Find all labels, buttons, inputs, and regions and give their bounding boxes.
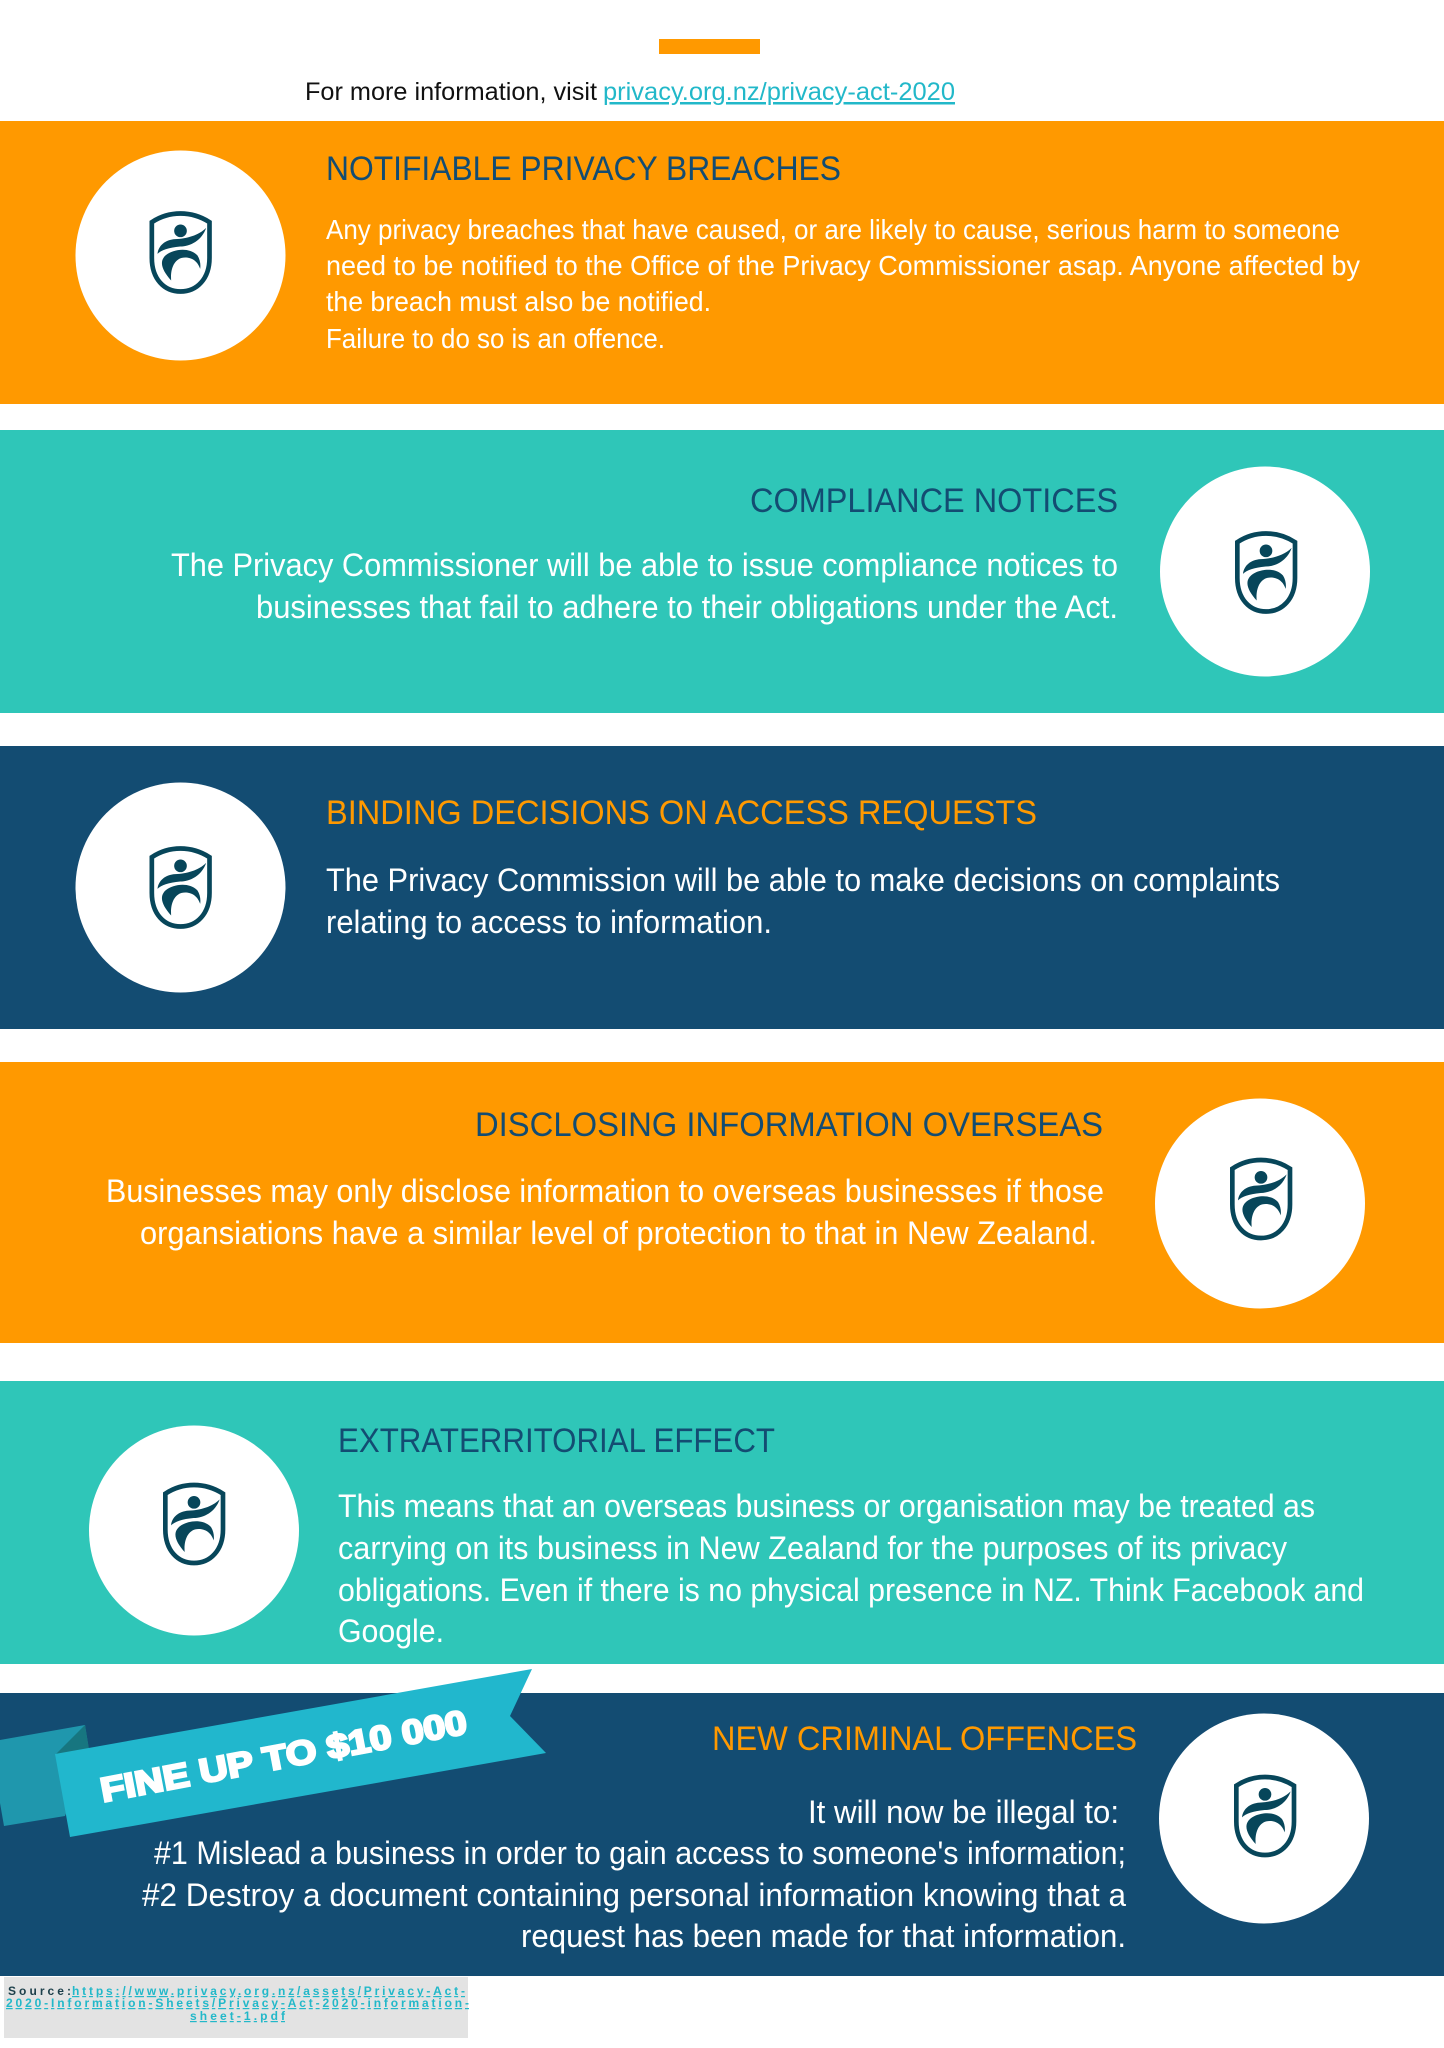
accent bar	[659, 39, 760, 54]
body text	[338, 1488, 1364, 1649]
ribbon: fine up to $10 000: FINE UP TO $10 000	[97, 1703, 470, 1810]
panel: notifiable privacy breaches	[0, 121, 1444, 404]
icon: shield badge	[1159, 1714, 1369, 1924]
body text: obligations. Even if there is no physical presence in NZ. Think Facebook and	[338, 1572, 1364, 1608]
icon: shield badge	[76, 782, 286, 992]
body text: carrying on its business in New Zealand for the purposes of its privacy	[338, 1530, 1287, 1566]
heading: DISCLOSING INFORMATION OVERSEAS	[475, 1106, 1103, 1144]
panel: new criminal offences	[0, 1693, 1444, 1976]
heading: NOTIFIABLE PRIVACY BREACHES	[326, 150, 841, 188]
icon: shield badge	[1155, 1098, 1365, 1308]
icon: shield badge	[89, 1426, 299, 1636]
icon: shield badge	[1160, 466, 1370, 676]
body text: businesses that fail to adhere to their obligations under the Act.	[256, 589, 1118, 625]
body text: the breach must also be notified.	[326, 286, 711, 317]
body text	[326, 862, 1280, 940]
source citation: sheet-1.pdf	[190, 2009, 286, 2023]
panel: extraterritorial effect	[0, 1381, 1444, 1664]
source citation: https://www.privacy.org.nz/assets/Privacy-Act-	[72, 1984, 465, 1998]
panel: binding decisions on access requests	[0, 746, 1444, 1029]
body text	[106, 1173, 1104, 1251]
source citation: Source:	[8, 1984, 71, 1998]
body text: Failure to do so is an offence.	[326, 323, 665, 354]
ribbon: fine up to $10 000	[0, 1669, 546, 1837]
heading: NEW CRIMINAL OFFENCES	[712, 1720, 1137, 1758]
source citation	[4, 1977, 469, 2038]
body text: The Privacy Commission will be able to make decisions on complaints	[326, 862, 1280, 898]
more information line: For more information, visit	[305, 78, 597, 106]
body text: Businesses may only disclose information to overseas businesses if those	[106, 1173, 1104, 1209]
body text: This means that an overseas business or organisation may be treated as	[338, 1488, 1315, 1524]
body text: #2 Destroy a document containing personal information knowing that a	[142, 1877, 1126, 1913]
body text: It will now be illegal to:	[808, 1794, 1119, 1830]
body text	[171, 547, 1118, 625]
body text: relating to access to information.	[326, 904, 772, 940]
more information line: privacy.org.nz/privacy-act-2020	[603, 78, 955, 106]
body text: The Privacy Commissioner will be able to issue compliance notices to	[171, 547, 1118, 583]
body text: #1 Mislead a business in order to gain access to someone's information;	[154, 1835, 1126, 1871]
panel: disclosing information overseas	[0, 1062, 1444, 1343]
body text: request has been made for that information.	[521, 1918, 1126, 1954]
body text: organsiations have a similar level of protection to that in New Zealand.	[140, 1215, 1097, 1251]
body text: Google.	[338, 1613, 444, 1649]
icon: shield badge	[76, 150, 286, 360]
more information line	[305, 78, 955, 106]
body text	[326, 214, 1360, 354]
heading: EXTRATERRITORIAL EFFECT	[338, 1422, 775, 1460]
panel: compliance notices	[0, 430, 1444, 713]
body text: need to be notified to the Office of the Privacy Commissioner asap. Anyone affected by	[326, 250, 1360, 281]
heading: COMPLIANCE NOTICES	[750, 482, 1118, 520]
body text	[142, 1794, 1126, 1954]
heading: BINDING DECISIONS ON ACCESS REQUESTS	[326, 794, 1037, 832]
source citation: 2020-Information-Sheets/Privacy-Act-2020-information-	[6, 1996, 469, 2010]
body text: Any privacy breaches that have caused, or are likely to cause, serious harm to someone	[326, 214, 1340, 245]
